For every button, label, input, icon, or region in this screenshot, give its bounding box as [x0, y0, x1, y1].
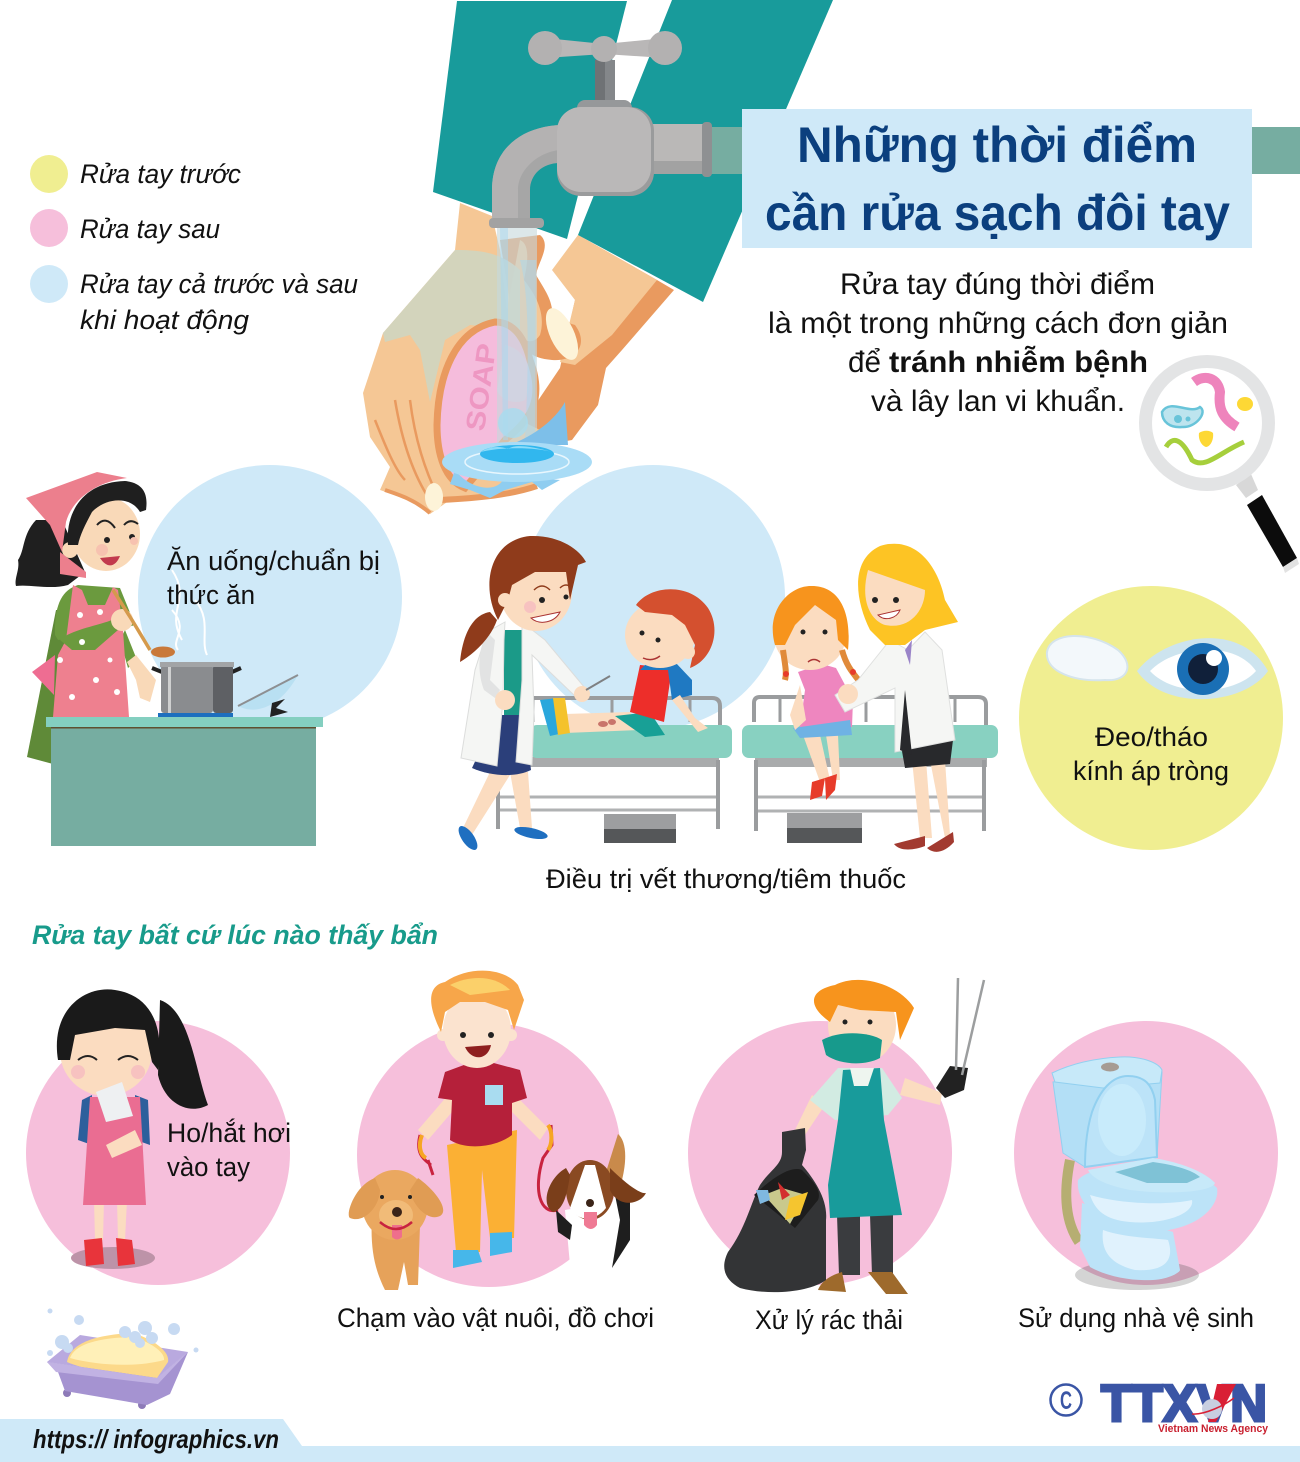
- icon: magnifier with germs: [1139, 355, 1299, 573]
- doctor left: [455, 536, 610, 853]
- title: Những thời điểm: [797, 117, 1197, 173]
- woman: [16, 472, 175, 764]
- label: coughing: vào tay: [167, 1152, 250, 1182]
- title: cần rửa sạch đôi tay: [765, 185, 1230, 241]
- icon: water pipe: [708, 127, 744, 174]
- intro text: tránh nhiễm bệnh: [889, 345, 1148, 379]
- footer band: [0, 1419, 1300, 1462]
- burner: [158, 713, 233, 717]
- label: treatment: Điều trị vết thương/tiêm thuốc: [546, 864, 906, 894]
- legend item: before: Rửa tay trước: [80, 159, 241, 189]
- label: eating: [167, 546, 380, 610]
- label: coughing: [167, 1117, 291, 1182]
- intro text: để: [848, 346, 881, 379]
- background circle: treatment: [521, 465, 785, 729]
- illustration: washing hands under faucet: [363, 0, 833, 514]
- icon: left hand: [363, 203, 560, 514]
- glass lid: [238, 675, 298, 717]
- logo: [1050, 1375, 1269, 1435]
- illustration: treatment scene: [455, 536, 998, 853]
- intro text: Rửa tay đúng thời điểm: [840, 268, 1155, 301]
- illustration: boy with dogs: [349, 971, 646, 1290]
- label: contact lens: kính áp tròng: [1073, 756, 1229, 786]
- title box: [742, 109, 1252, 248]
- icon: contact lens: [1047, 636, 1127, 680]
- intro text: là một trong những cách đơn giản: [768, 307, 1228, 340]
- icon: faucet: [489, 31, 712, 228]
- icon: water splash: [442, 402, 592, 498]
- boy patient: [540, 589, 714, 737]
- icon: eye: [1137, 638, 1268, 699]
- legend item: after: Rửa tay sau: [80, 214, 220, 244]
- trash bag: [724, 1128, 826, 1292]
- illustration: waste handling: [724, 978, 984, 1294]
- bed left: [497, 698, 732, 843]
- background circle: pets: [357, 1023, 621, 1287]
- pot: [152, 662, 241, 713]
- label: coughing: Ho/hắt hơi: [167, 1117, 291, 1148]
- copyright mark: [1050, 1384, 1082, 1416]
- bed right: [742, 697, 998, 843]
- icon: right hand: [500, 235, 674, 445]
- icon: soap bar: [437, 322, 536, 488]
- soap label: SOAP: [460, 342, 502, 433]
- counter: [46, 717, 323, 846]
- worker: [795, 978, 984, 1294]
- footer url: https:// infographics.vn: [33, 1424, 279, 1454]
- boy: [418, 971, 558, 1268]
- title: [765, 117, 1230, 241]
- illustration: contact lens and eye: [1047, 636, 1268, 699]
- icon: sleeve left: [433, 1, 627, 239]
- label: pets: Chạm vào vật nuôi, đồ chơi: [337, 1303, 654, 1333]
- copyright mark: C: [1060, 1387, 1072, 1415]
- icon: soap dish: [47, 1308, 198, 1409]
- icon: sleeve right: [578, 0, 833, 302]
- label: toilet: Sử dụng nhà vệ sinh: [1018, 1303, 1254, 1333]
- legend item: before and after: Rửa tay cả trước và sau: [80, 269, 358, 299]
- dog right: [547, 1134, 646, 1272]
- legend item: before: [30, 155, 241, 193]
- background circle: coughing: [26, 1021, 290, 1285]
- label: contact lens: Đeo/tháo: [1095, 722, 1208, 752]
- label: eating: Ăn uống/chuẩn bị: [167, 546, 380, 576]
- background circle: contact lens: [1019, 586, 1283, 850]
- illustration: woman cooking: [16, 472, 323, 846]
- icon: thumb nails: [425, 304, 585, 511]
- logo red mark: [1192, 1384, 1236, 1422]
- dog left: [349, 1170, 443, 1290]
- legend: [30, 155, 358, 335]
- doctor right: [835, 544, 958, 852]
- legend item: before and after: [30, 265, 358, 335]
- intro text: và lây lan vi khuẩn.: [871, 385, 1125, 418]
- illustration: toilet: [1052, 1057, 1217, 1290]
- background circle: eating: [138, 465, 402, 729]
- legend item: after: [30, 209, 220, 247]
- label: waste: Xử lý rác thải: [755, 1305, 903, 1335]
- wordmark: TTXVN: [1101, 1375, 1267, 1433]
- label: contact lens: [1073, 722, 1229, 786]
- logo tagline: Vietnam News Agency: [1158, 1423, 1269, 1435]
- background circle: toilet: [1014, 1021, 1278, 1285]
- steam: [172, 570, 207, 655]
- section heading: Rửa tay bất cứ lúc nào thấy bẩn: [32, 920, 438, 950]
- intro text: [768, 268, 1228, 418]
- legend item: before and after: khi hoạt động: [80, 305, 249, 335]
- label: eating: thức ăn: [167, 580, 255, 610]
- pipe stub right: [1252, 127, 1300, 174]
- illustration: coughing girl: [57, 989, 208, 1269]
- girl patient: [773, 586, 860, 800]
- icon: water stream: [497, 228, 537, 444]
- background circle: waste: [688, 1021, 952, 1285]
